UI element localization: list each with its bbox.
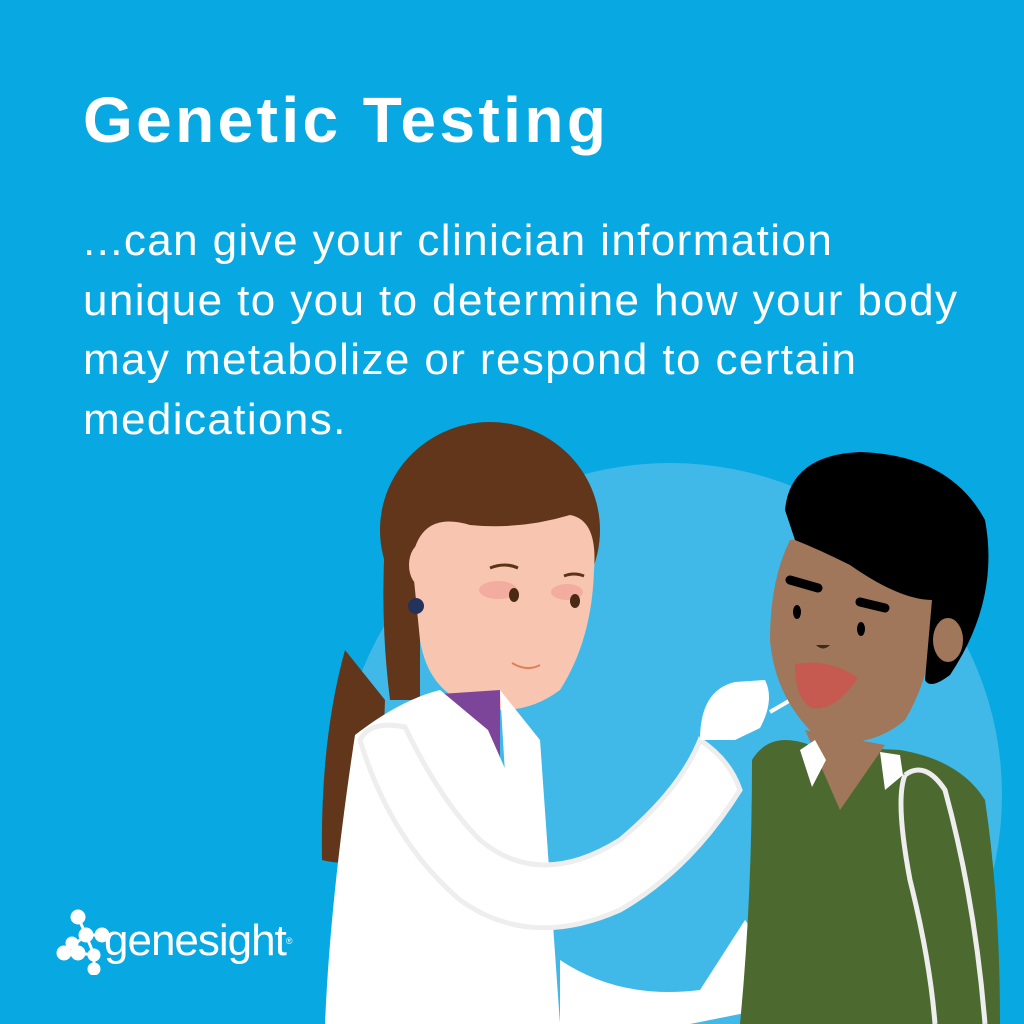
title: Genetic Testing — [83, 84, 609, 156]
logo: genesight — [56, 910, 292, 975]
logo text: genesight® — [104, 916, 291, 965]
body text: may metabolize or respond to certain — [83, 335, 857, 384]
body text — [83, 216, 958, 444]
body text: ...can give your clinician information — [83, 216, 833, 265]
body text: unique to you to determine how your body — [83, 276, 958, 324]
body text: medications. — [83, 394, 347, 444]
background circle — [338, 463, 1002, 1024]
icon: dots — [56, 910, 110, 975]
man patient — [740, 452, 1000, 1024]
woman clinician — [322, 422, 832, 1024]
swab — [770, 684, 818, 712]
